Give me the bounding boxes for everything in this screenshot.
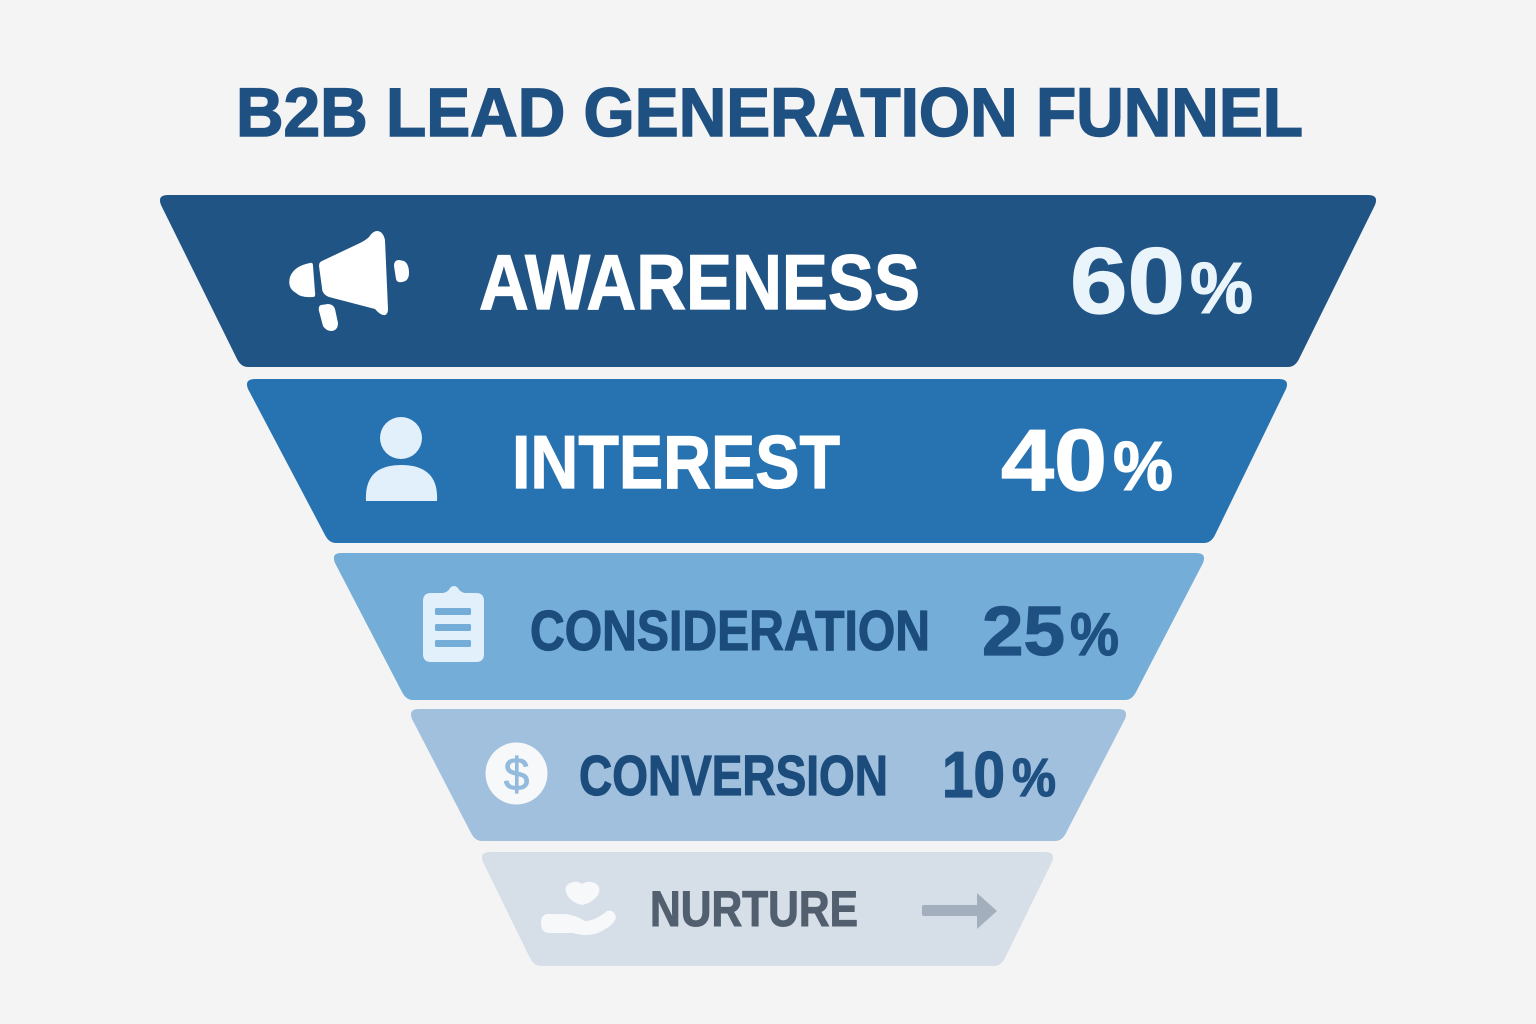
label: interest: INTEREST bbox=[512, 420, 840, 504]
label: consideration: CONSIDERATION bbox=[530, 599, 930, 663]
icon: hand holding heart bbox=[541, 882, 616, 935]
icon: person bbox=[366, 417, 437, 501]
value: 60 percent: 60 bbox=[1070, 228, 1185, 333]
value: 40 percent: % bbox=[1113, 427, 1173, 505]
icon: dollar coin bbox=[486, 742, 548, 804]
icon: clipboard bbox=[423, 586, 484, 662]
icon: megaphone bbox=[289, 231, 409, 331]
panel: awareness bbox=[160, 195, 1376, 367]
arrow bbox=[922, 893, 997, 929]
value: 40 percent: 40 bbox=[1001, 412, 1107, 509]
value: 25 percent: % bbox=[1070, 601, 1119, 668]
value: 40 percent bbox=[1001, 412, 1173, 509]
title: B2B LEAD GENERATION FUNNEL bbox=[236, 74, 1303, 151]
label: nurture: NURTURE bbox=[650, 881, 858, 937]
label: conversion: CONVERSION bbox=[579, 744, 888, 808]
panel: interest bbox=[247, 379, 1287, 543]
icon: dollar coin: $ bbox=[504, 748, 529, 800]
value: 25 percent bbox=[982, 592, 1119, 670]
value: 10 percent: 10 bbox=[942, 738, 1005, 811]
value: 10 percent bbox=[942, 738, 1056, 811]
value: 25 percent: 25 bbox=[982, 592, 1065, 670]
label: awareness: AWARENESS bbox=[479, 238, 920, 326]
panel: nurture bbox=[482, 852, 1053, 966]
value: 10 percent: % bbox=[1012, 748, 1056, 808]
value: 60 percent bbox=[1070, 228, 1253, 333]
value: 60 percent: % bbox=[1190, 249, 1253, 329]
panel: consideration bbox=[334, 553, 1204, 700]
panel: conversion bbox=[411, 709, 1126, 841]
